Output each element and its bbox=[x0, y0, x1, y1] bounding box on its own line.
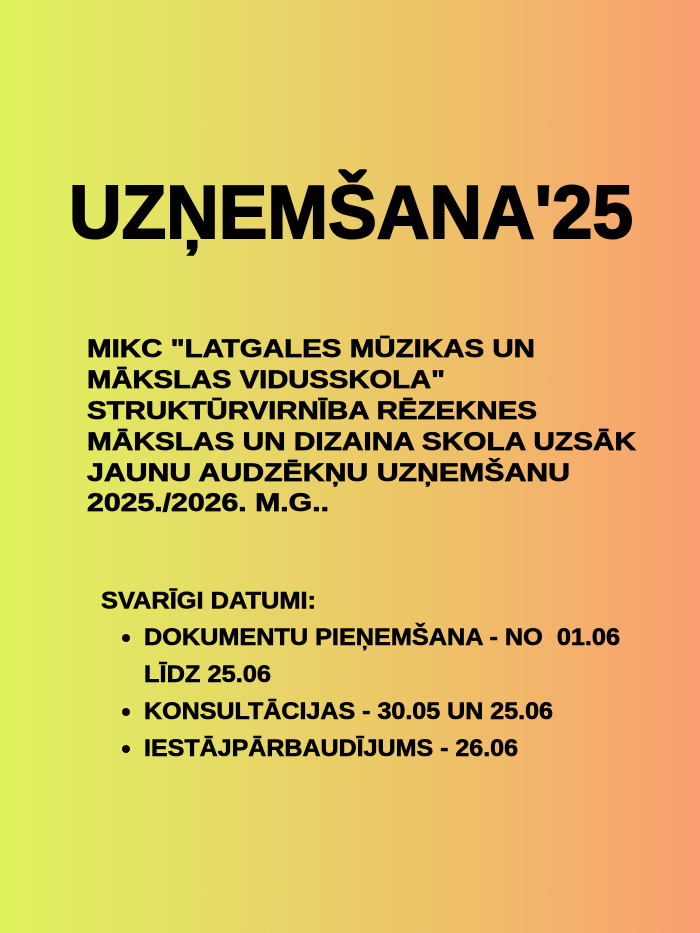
list item: consultations: KONSULTĀCIJAS - 30.05 UN 25.06 bbox=[144, 699, 553, 725]
intro text block: JAUNU AUDZĒKŅU UZŅEMŠANU bbox=[87, 457, 570, 487]
list item: document submission: LĪDZ 25.06 bbox=[144, 662, 271, 688]
list item: entrance exam: IESTĀJPĀRBAUDĪJUMS - 26.06 bbox=[144, 736, 518, 762]
intro text block: 2025./2026. M.G.. bbox=[87, 489, 329, 517]
list item: document submission: DOKUMENTU PIEŅEMŠANA - NO 01.06 bbox=[144, 623, 620, 651]
title: UZŅEMŠANA'25 bbox=[69, 170, 633, 255]
intro text block: MĀKSLAS VIDUSSKOLA" bbox=[87, 366, 445, 394]
intro text block: MĀKSLAS UN DIZAINA SKOLA UZSĀK bbox=[87, 428, 636, 456]
intro text block: MIKC "LATGALES MŪZIKAS UN bbox=[87, 335, 535, 363]
intro text block: STRUKTŪRVIRNĪBA RĒZEKNES bbox=[87, 397, 537, 425]
important dates list bbox=[101, 588, 620, 762]
list item: document submission bbox=[122, 623, 620, 688]
intro text block bbox=[87, 335, 636, 517]
dates heading: SVARĪGI DATUMI: bbox=[101, 588, 316, 614]
